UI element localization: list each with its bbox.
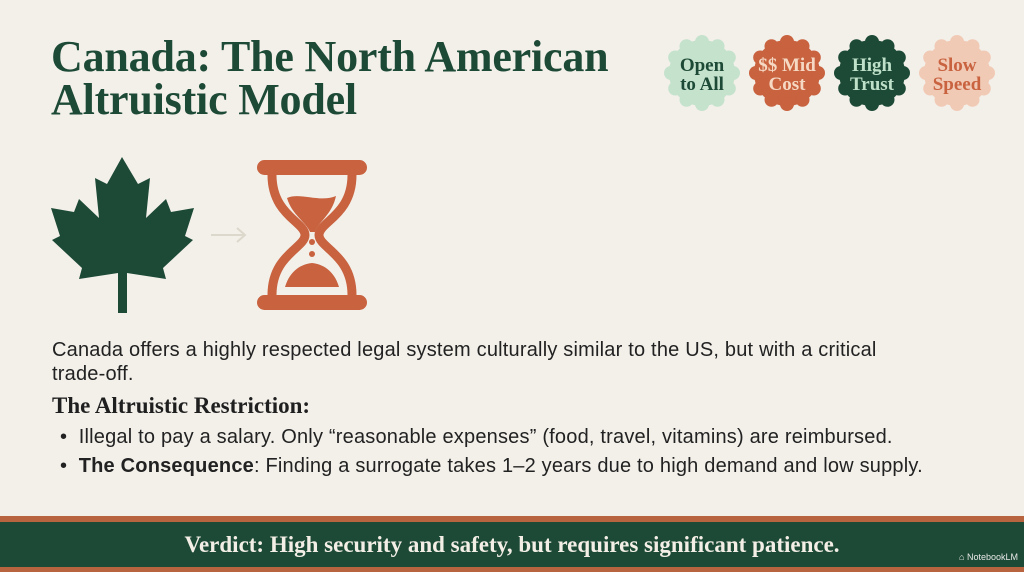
- badge: open to all: [664, 35, 740, 111]
- bullet 1: • Illegal to pay a salary. Only “reasonable expenses” (food, travel, vitamins) are reimbursed.: [60, 426, 893, 448]
- badge: open to all: to All: [680, 74, 724, 95]
- verdict banner: Verdict: High security and safety, but requires significant patience.: [184, 532, 840, 557]
- badge: slow speed: Speed: [933, 74, 982, 95]
- badges: [664, 35, 995, 111]
- badge: mid cost: $$ Mid: [758, 55, 816, 76]
- badge: high trust: Trust: [850, 74, 895, 95]
- heading: altruistic restriction: The Altruistic Restriction:: [52, 393, 310, 418]
- title: Altruistic Model: [51, 75, 357, 124]
- verdict banner: [0, 516, 1024, 572]
- badge: slow speed: [919, 35, 995, 111]
- badge: mid cost: Cost: [769, 74, 806, 95]
- title: Canada: The North American: [51, 32, 608, 81]
- logo: ⌂ NotebookLM: [959, 552, 1018, 562]
- icon: maple leaf: [51, 157, 194, 313]
- icons row: [51, 157, 367, 313]
- badge: high trust: [834, 35, 910, 111]
- badge: open to all: Open: [680, 55, 725, 76]
- title: [51, 32, 608, 124]
- badge: slow speed: Slow: [937, 55, 977, 76]
- icon: hourglass: [257, 160, 367, 310]
- bullet 2: • The Consequence: Finding a surrogate takes 1–2 years due to high demand and low supply.: [60, 455, 923, 477]
- badge: high trust: High: [852, 55, 892, 76]
- arrow: [211, 228, 245, 242]
- badge: mid cost: [749, 35, 825, 111]
- intro text: Canada offers a highly respected legal system culturally similar to the US, but with a critical trade-off.: [52, 339, 877, 385]
